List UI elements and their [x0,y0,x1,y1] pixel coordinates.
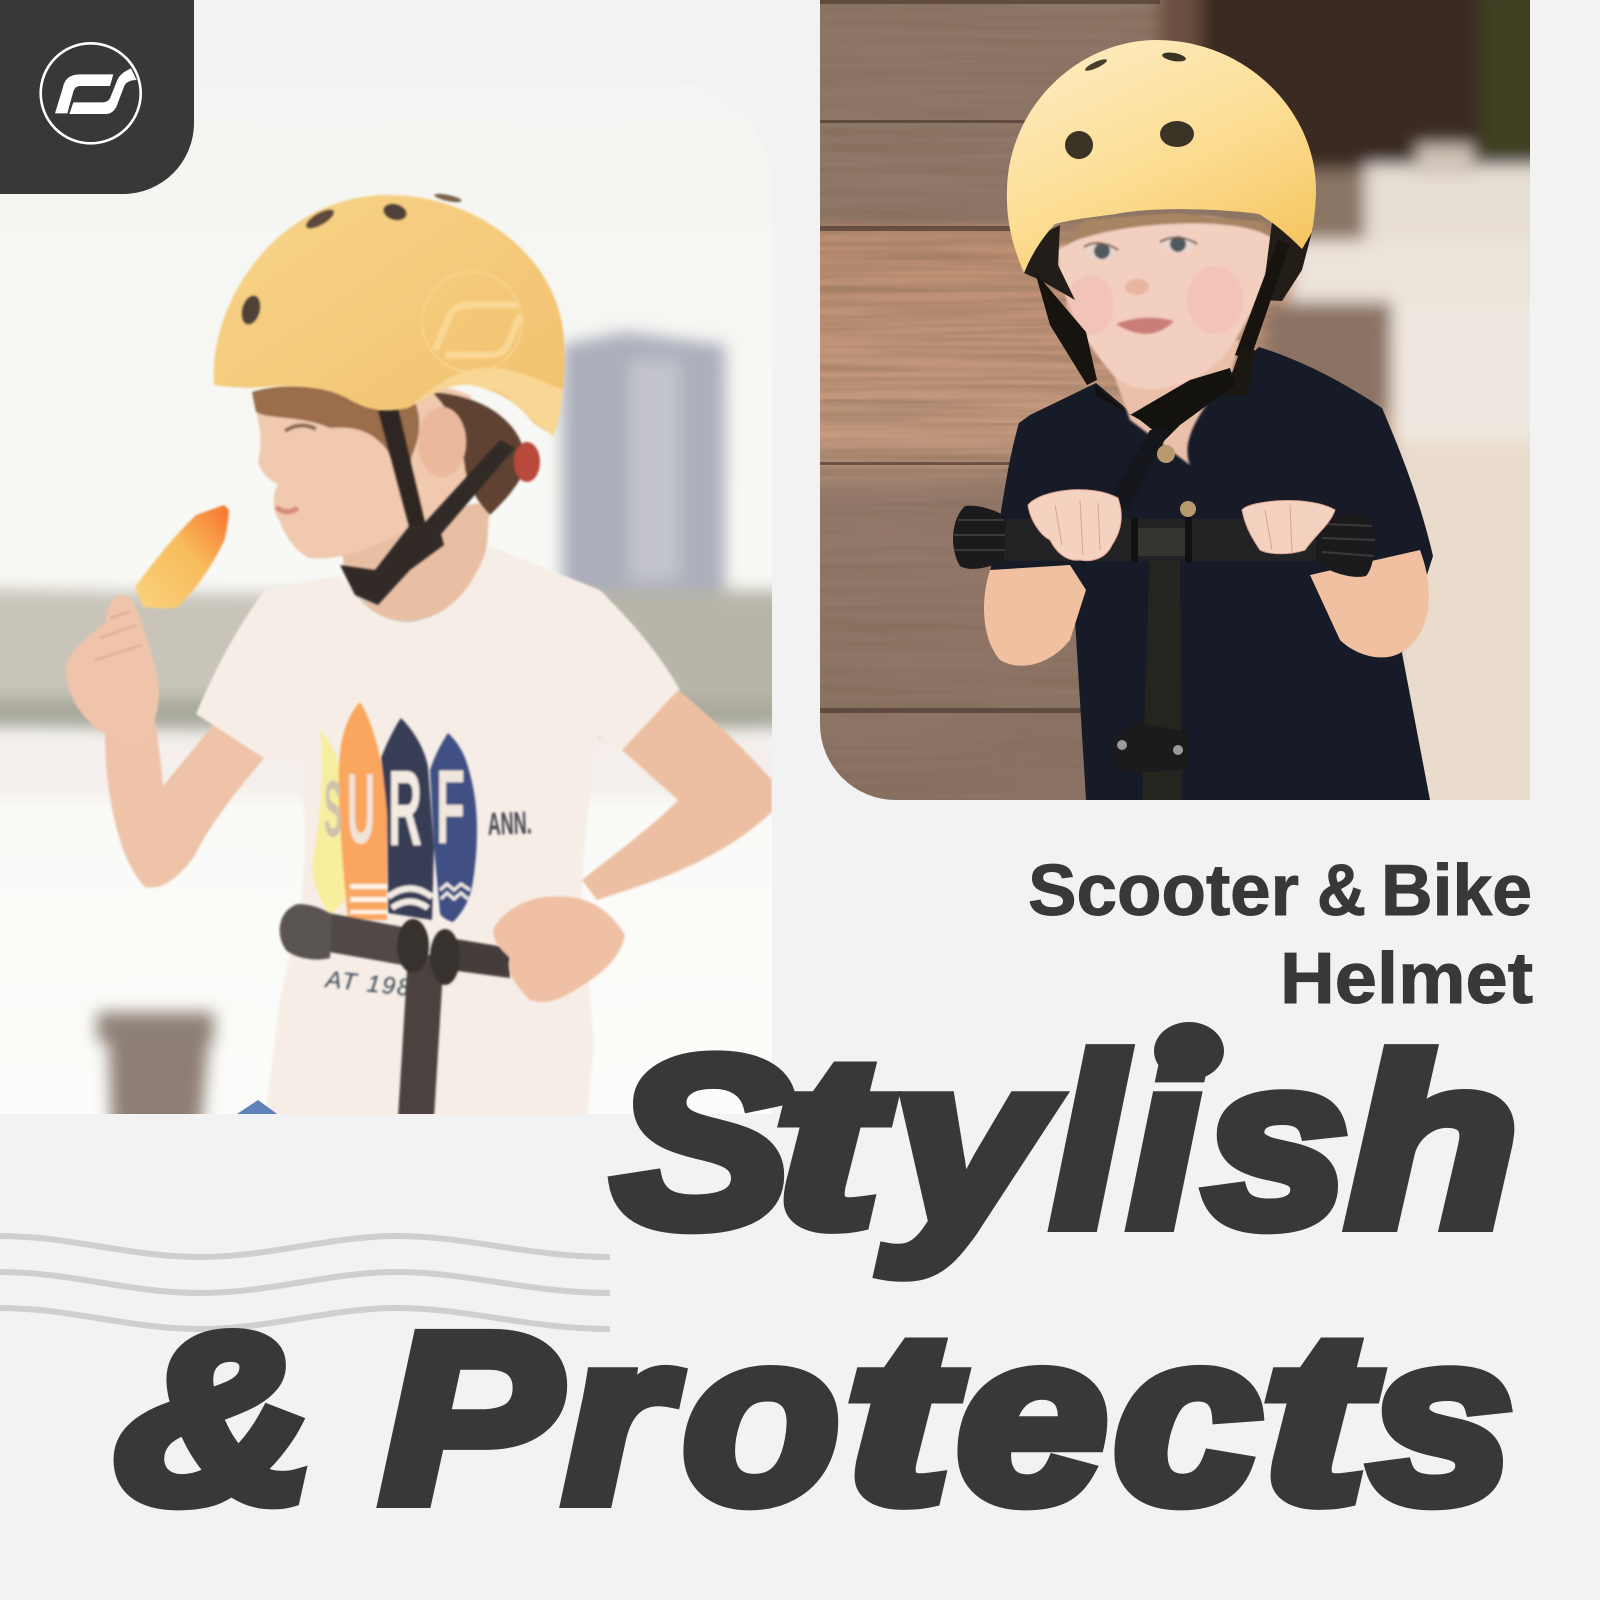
headline: Stylish: t [775,1008,891,1276]
helmet padding and straps [1024,222,1313,517]
subheading [1028,851,1533,1019]
helmet vents [240,294,262,326]
subheading: Helmet [1280,939,1533,1019]
t-shirt surfboard print: U [347,753,375,865]
t-shirt surfboard print [312,702,532,1002]
ice lolly [135,505,229,608]
headline: Stylish: h [1347,1008,1518,1276]
scooter handlebar and stem [280,904,510,1118]
headline: & Protects: t [1262,1284,1378,1552]
t-shirt surfboard print: ANN. [487,804,532,842]
polo shirt [989,347,1433,800]
headline: & Protects: o [683,1284,839,1552]
headline: Stylish [613,1008,1518,1276]
neck and face [1058,213,1274,465]
headline: & Protects [115,1284,1513,1552]
wavy decorative lines [0,1236,610,1329]
headline: Stylish: s [1205,1008,1348,1276]
helmet strap and buckle [340,408,515,605]
headline: & Protects: c [1114,1284,1260,1552]
subheading: Bike [1381,851,1532,931]
logo badge [0,0,194,194]
yellow helmet [1007,40,1316,273]
headline: & Protects: t [846,1284,962,1552]
scooter stem clamp [1111,722,1188,772]
hand on handlebar [493,896,625,1002]
arms [984,565,1086,666]
helmet vents [1065,131,1093,159]
subheading: & [1317,851,1366,931]
headline: & Protects: r [564,1284,680,1552]
headline: Stylish: i [1129,1008,1204,1276]
logo mark [41,43,141,143]
t-shirt surfboard print: R [388,747,422,868]
headline: Stylish: y [882,1008,1057,1276]
hands on handlebar [1028,490,1335,561]
eyes, nose and mouth [1084,235,1197,334]
subheading: Scooter [1028,851,1299,931]
neck and head [252,376,540,621]
headline: & Protects: P [381,1284,560,1552]
scooter handlebar [953,506,1375,577]
headline: Stylish: S [613,1008,791,1276]
headline: Stylish: l [1052,1008,1127,1276]
t-shirt surfboard print: F [436,748,465,866]
photo: boy on scooter facing camera [820,0,1560,820]
headline: & Protects: & [115,1284,315,1552]
t-shirt surfboard print: S [324,764,342,853]
t-shirt [196,545,772,1118]
scooter stem [1142,545,1182,800]
helmet, yellow [214,192,565,436]
jeans [237,1100,278,1114]
t-shirt surfboard print: AT 198 [322,966,412,1002]
photo: boy eating ice lolly wearing helmet [0,192,772,1114]
far arm and hand holding ice lolly [66,505,275,888]
headline: & Protects: s [1370,1284,1513,1552]
headline: & Protects: e [957,1284,1107,1552]
